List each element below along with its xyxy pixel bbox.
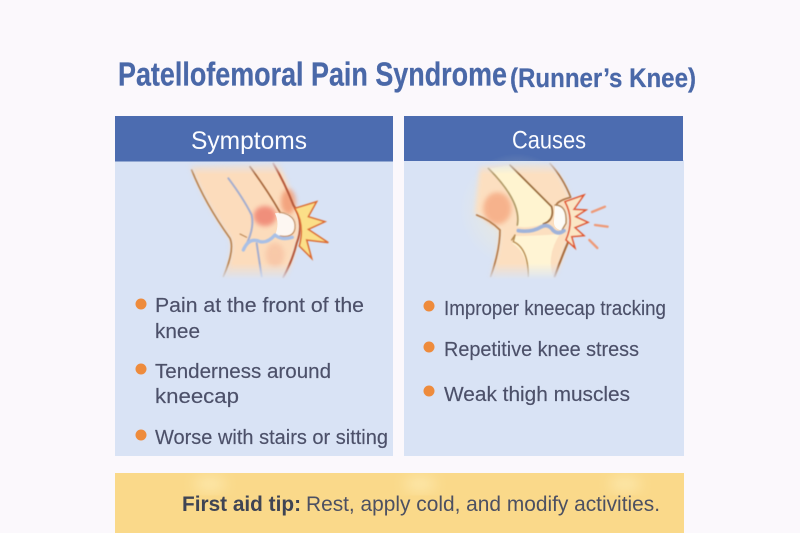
bullet: thigh muscles: Weak thigh muscles	[444, 383, 630, 406]
bullet: tenderness: kneecap	[155, 385, 239, 408]
pain burst	[565, 195, 588, 248]
title: (Runner’s Knee)	[510, 63, 696, 93]
panel: causes	[404, 116, 684, 456]
icon: knee with pain burst	[190, 162, 328, 280]
symptoms header: Symptoms	[191, 127, 307, 155]
pain burst	[295, 202, 328, 258]
causes list	[424, 297, 666, 406]
causes header	[404, 116, 683, 161]
first aid tip banner	[115, 473, 684, 533]
tip text: First aid tip:	[182, 493, 301, 516]
causes header: Causes	[512, 126, 586, 154]
kneecap	[275, 213, 296, 236]
pain rays	[589, 207, 608, 248]
bullet: tenderness: Tenderness around	[155, 360, 331, 383]
panel: symptoms	[115, 116, 393, 456]
bones	[490, 165, 552, 227]
symptoms list	[136, 294, 388, 449]
bullet: tenderness	[136, 360, 331, 408]
symptoms header	[115, 116, 393, 162]
bullet: pain at the front: knee	[155, 320, 200, 343]
bullet: pain at the front: Pain at the front of the	[155, 294, 364, 317]
bullet: knee stress: Repetitive knee stress	[444, 338, 639, 361]
bullet: pain at the front	[136, 294, 364, 343]
icon: knee joint with pain rays	[472, 158, 610, 278]
title: Patellofemoral Pain Syndrome	[118, 56, 507, 92]
tip text: Rest, apply cold, and modify activities.	[306, 493, 660, 516]
bullet: worse with stairs: Worse with stairs or sitting	[155, 426, 388, 449]
bullet: kneecap tracking: Improper kneecap tracking	[444, 297, 666, 320]
